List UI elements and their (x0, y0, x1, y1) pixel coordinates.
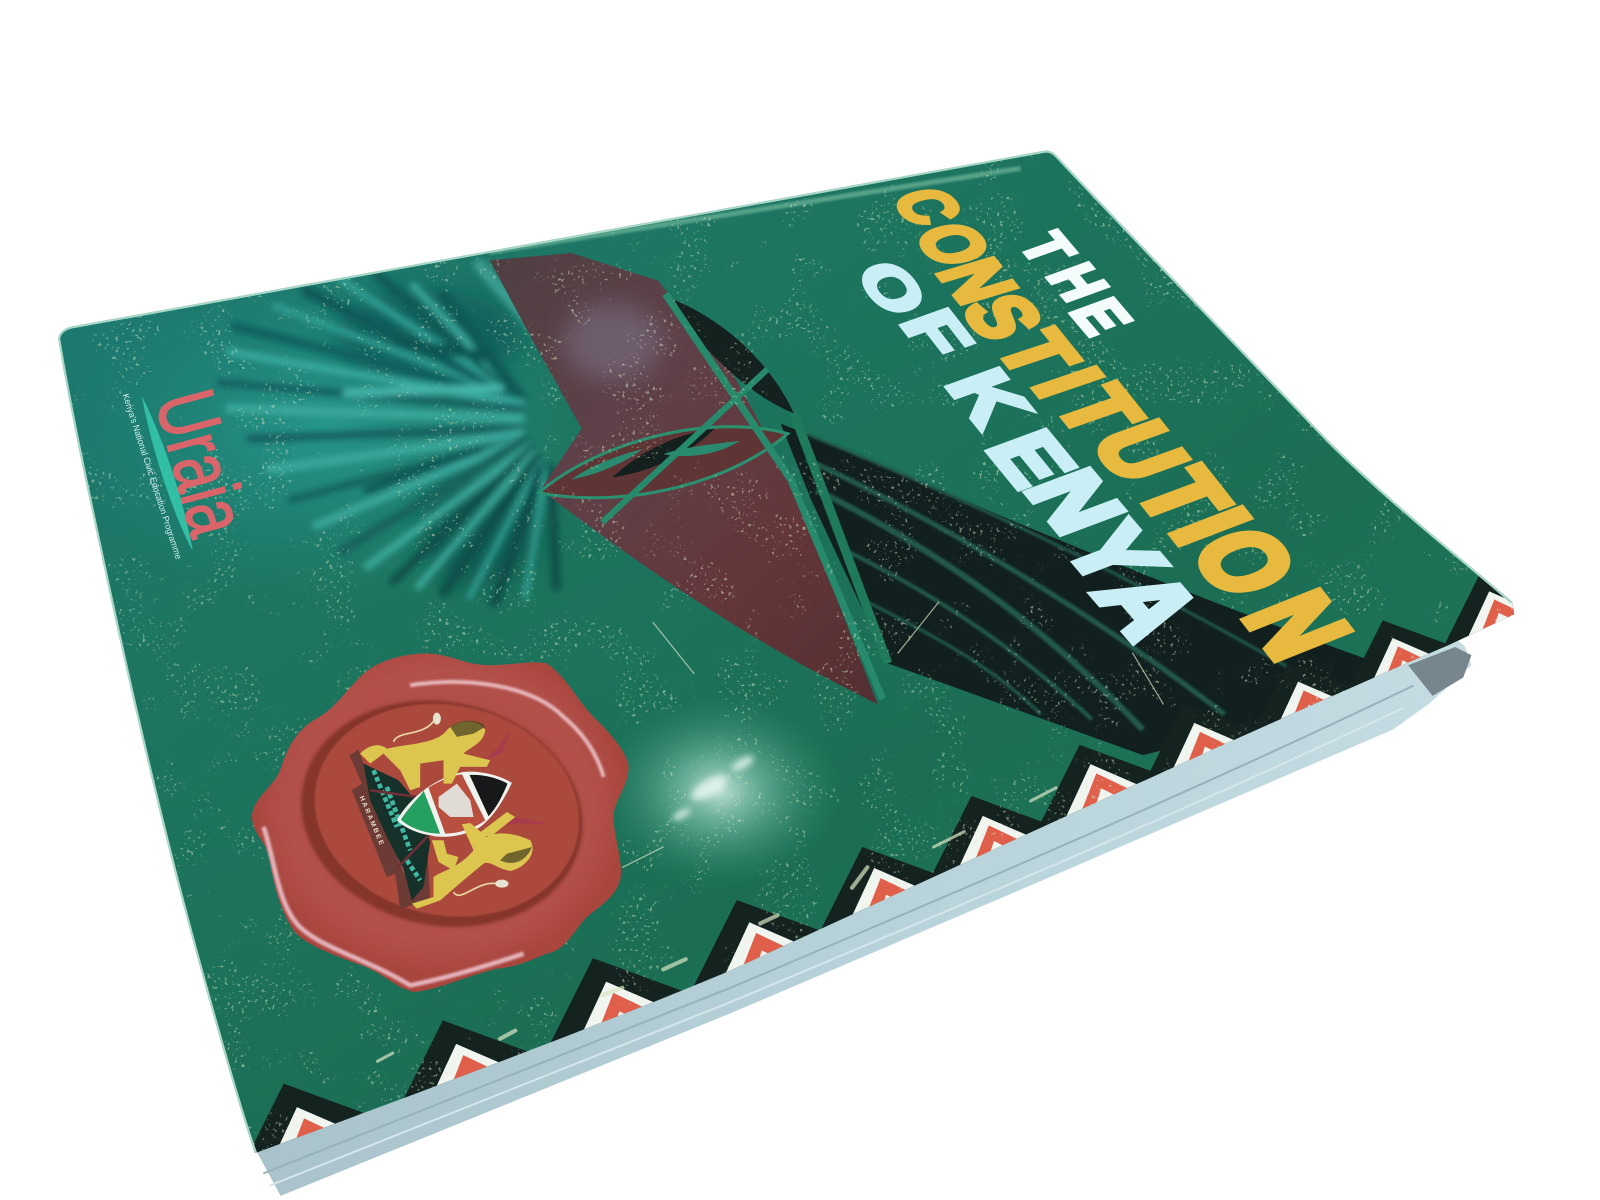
title line: THE (1005, 225, 1147, 343)
spears (370, 790, 430, 869)
title line: CONSTITUTION: I (1147, 495, 1275, 557)
upper spear leaf (674, 300, 794, 414)
title line: OF KENYA: Y (1038, 511, 1188, 599)
title line: CONSTITUTION: S (942, 284, 1064, 349)
chevron border (233, 574, 1556, 1191)
title line: CONSTITUTION: C (875, 181, 980, 232)
Uraia logo (121, 380, 266, 560)
upper lion (360, 721, 490, 790)
title line: THE: T (1005, 225, 1089, 272)
wax seal (252, 654, 629, 992)
black sweeping band (663, 296, 1388, 755)
title line: CONSTITUTION: T (975, 321, 1098, 387)
seal inner well (280, 675, 604, 952)
teal glow and feather (146, 258, 563, 609)
motto: HARAMBEE (358, 795, 385, 848)
title line: OF KENYA: A (1069, 557, 1228, 652)
title line: CONSTITUTION: N (1218, 577, 1376, 674)
lower lion (412, 823, 533, 909)
title line: CONSTITUTION: T (1033, 374, 1164, 447)
title line: THE: E (1055, 290, 1147, 343)
cover edge highlight (58, 151, 1512, 1153)
base ribbon (349, 750, 430, 909)
title line: OF KENYA (841, 253, 1228, 652)
seal body (252, 654, 629, 992)
title line: CONSTITUTION: N (918, 250, 1036, 312)
green swoosh (142, 396, 193, 551)
title line: OF KENYA: E (966, 420, 1095, 498)
title line: THE: H (1032, 256, 1122, 309)
title line: OF KENYA: F (884, 301, 988, 366)
book photo (58, 150, 1514, 1196)
central lens and green cross bars (539, 294, 888, 699)
dark grey page corner (1408, 647, 1471, 696)
tagline: Kenya's National Civic Education Programme (121, 392, 184, 560)
seal rim highlights (410, 682, 604, 777)
title line: CONSTITUTION: T (1111, 456, 1252, 538)
title line: CONSTITUTION (875, 181, 1376, 674)
title line: CONSTITUTION: I (1012, 357, 1125, 407)
title line: OF KENYA: O (841, 253, 943, 323)
brown shield shape (490, 253, 878, 704)
title line: CONSTITUTION: O (1165, 513, 1322, 611)
title line: CONSTITUTION: O (896, 215, 1010, 274)
title line: OF KENYA: K (928, 359, 1049, 436)
shield glare (563, 303, 661, 381)
mount (363, 764, 430, 900)
scratches (378, 602, 1163, 1061)
coat of arms (349, 713, 550, 909)
page block (253, 633, 1471, 1196)
title line: CONSTITUTION: U (1069, 410, 1211, 494)
gloss reflection (620, 712, 819, 870)
top crease highlight (490, 168, 1020, 252)
title (841, 181, 1376, 674)
shield (397, 772, 512, 837)
title line: OF KENYA: N (1003, 457, 1147, 546)
wordmark: Uraia (138, 380, 266, 545)
